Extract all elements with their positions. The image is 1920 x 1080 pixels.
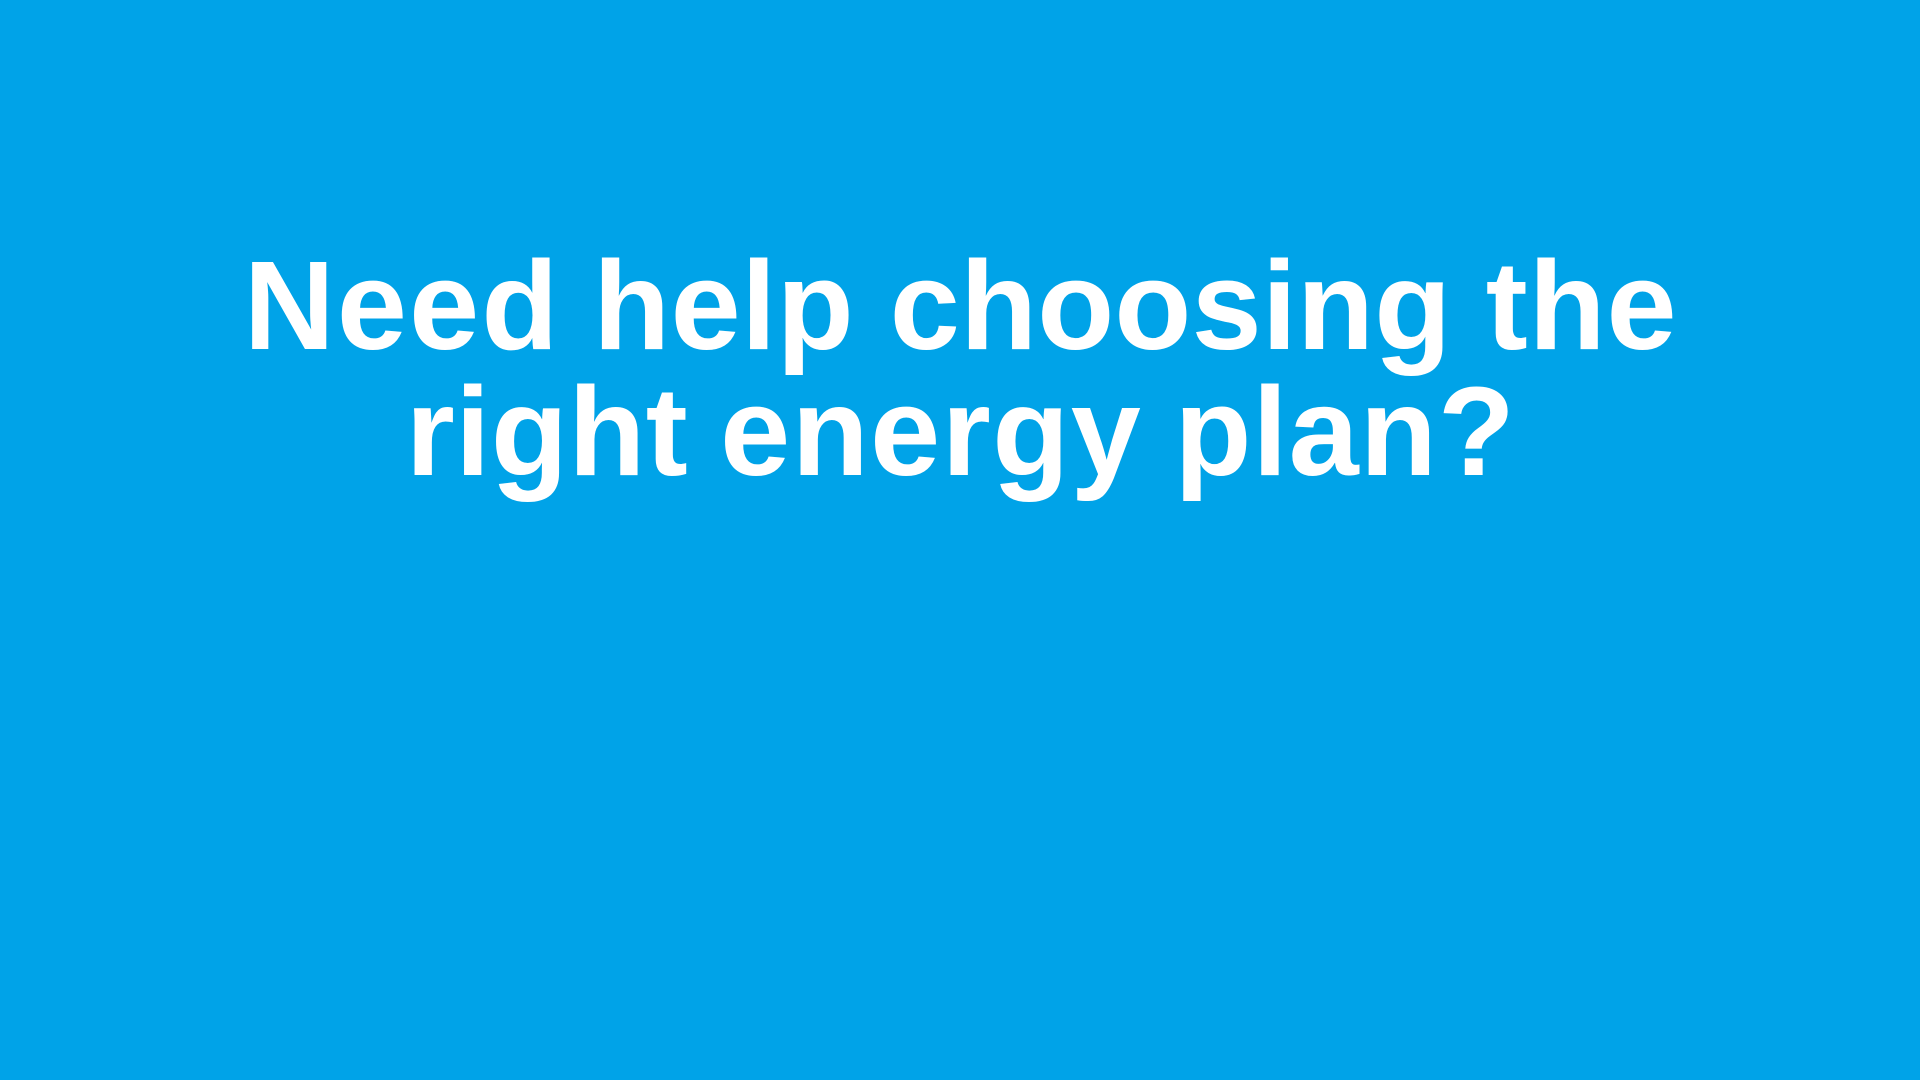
title [244,235,1677,502]
title: right energy plan? [406,361,1516,502]
title: Need help choosing the [244,235,1677,376]
